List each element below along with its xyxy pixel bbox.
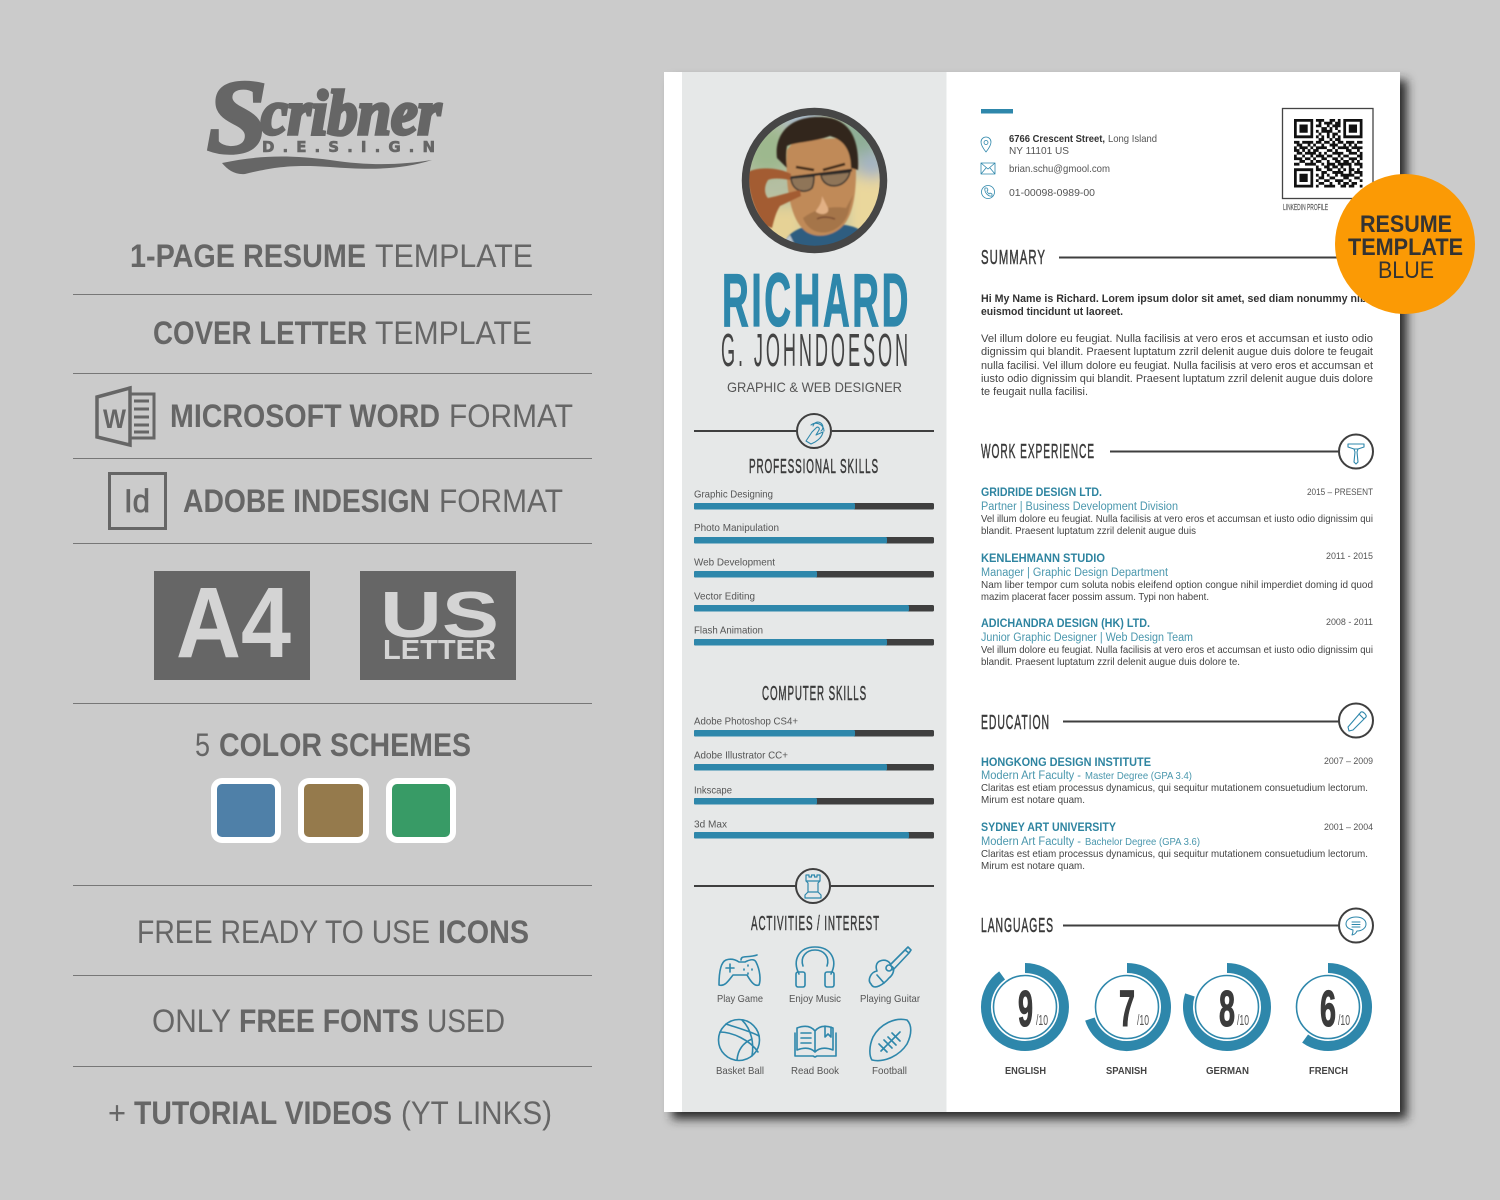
job: Kenlehmann Studio: KENLEHMANN STUDIO [981, 553, 1105, 565]
feature: only free fonts used: ONLY [152, 1003, 231, 1039]
skill: vector editing: Vector Editing [694, 590, 755, 602]
job: Adichandra Design: ADICHANDRA DESIGN (HK) LTD. [981, 618, 1150, 630]
summary body: nulla facilisi. Vel illum dolore eu feugiat. Nulla facilisis at vero eros et accumsan et [981, 360, 1373, 372]
resume page: G. JOHNDOESON [721, 324, 911, 376]
skill: web development [694, 556, 934, 578]
skill: inkscape [694, 784, 934, 804]
contact: address: 6766 Crescent Street, [1009, 133, 1105, 145]
badge: resume template blue: BLUE [1378, 257, 1434, 284]
job: Adichandra Design: Vel illum dolore eu feugiat. Nulla facilisis at vero eros et accumsan et iusto odio dignissim qui [981, 644, 1373, 656]
summary body: iusto odio dignissim qui blandit. Praesent luptatum zzril delenit augue duis dolore [981, 373, 1373, 385]
school: Hongkong Design Institute: HONGKONG DESIGN INSTITUTE [981, 757, 1151, 769]
section heading: education: EDUCATION [981, 712, 1050, 734]
feature: cover letter template: COVER LETTER [153, 315, 367, 351]
school: Sydney Art University [981, 822, 1373, 872]
job title: GRAPHIC & WEB DESIGNER [727, 379, 902, 395]
label: playing guitar: Playing Guitar [860, 993, 920, 1005]
job: Adichandra Design: 2008 - 2011 [1326, 617, 1373, 628]
feature: 5 color schemes: 5 [195, 727, 210, 763]
badge: US Letter: US [380, 578, 499, 651]
logo: Scribner Design: cribner [261, 77, 442, 148]
feature: Microsoft Word format: FORMAT [449, 398, 573, 434]
language gauge: Spanish 7/10: 7 [1119, 980, 1135, 1037]
job: Kenlehmann Studio: Nam liber tempor cum soluta nobis eleifend option congue nihil imperdiet doming id quod [981, 579, 1373, 591]
contact: phone [982, 186, 1095, 199]
feature: cover letter template: TEMPLATE [375, 315, 532, 351]
section heading: summary: SUMMARY [981, 247, 1046, 269]
skill: vector editing [694, 590, 934, 612]
job: Adichandra Design: blandit. Praesent luptatum zzril delenit augue duis dolore te. [981, 656, 1240, 668]
badge: A4: A4 [176, 567, 291, 679]
language gauge: German 8/10: /10 [1237, 1012, 1249, 1029]
panel: main content [981, 108, 1373, 1077]
contact: phone: 01-00098-0989-00 [1009, 187, 1095, 199]
school: Hongkong Design Institute: Mirum est notare quam. [981, 794, 1085, 806]
language gauge: German 8/10: GERMAN [1206, 1065, 1249, 1077]
feature: free ready to use icons: FREE READY TO USE [137, 914, 430, 950]
feature: Adobe InDesign format: FORMAT [439, 483, 563, 519]
job: Kenlehmann Studio [981, 551, 1373, 603]
skill: photoshop: Adobe Photoshop CS4+ [694, 716, 798, 728]
job: Adichandra Design [981, 617, 1373, 668]
feature: only free fonts used [152, 1003, 505, 1039]
feature: Adobe InDesign format: ADOBE INDESIGN [183, 483, 430, 519]
feature: tutorial videos: + [108, 1095, 126, 1131]
skill: photo manipulation: Photo Manipulation [694, 522, 779, 534]
language gauge: English 9/10: ENGLISH [1005, 1065, 1046, 1077]
language gauge: French 6/10 [1296, 968, 1367, 1077]
summary body: te feugait nulla facilisi. [981, 386, 1088, 398]
feature: only free fonts used: USED [427, 1003, 505, 1039]
school: Sydney Art University: SYDNEY ART UNIVERSITY [981, 822, 1116, 834]
language gauge: French 6/10: /10 [1338, 1012, 1350, 1029]
feature: Microsoft Word format: MICROSOFT WORD [170, 398, 440, 434]
job: Kenlehmann Studio: 2011 - 2015 [1326, 551, 1373, 562]
language gauge: English 9/10: 9 [1018, 980, 1033, 1037]
activity: play game [719, 955, 760, 985]
skill: photoshop [694, 716, 934, 736]
summary body: Vel illum dolore eu feugiat. Nulla facilisis at vero eros et accumsan et iusto odio [981, 333, 1373, 345]
job: Adichandra Design: Junior Graphic Designer | Web Design Team [981, 632, 1193, 644]
job: Gridride Design: Vel illum dolore eu feugiat. Nulla facilisis at vero eros et accumsan et iusto odio dignissim qui [981, 513, 1373, 525]
panel: sidebar: ACTIVITIES / INTEREST [751, 913, 880, 935]
feature: 5 color schemes: COLOR SCHEMES [219, 727, 471, 763]
skill: graphic designing: Graphic Designing [694, 488, 773, 500]
contact: address: NY 11101 US [1009, 145, 1069, 157]
icon: Adobe InDesign: Id [124, 483, 150, 519]
icon: Microsoft Word [97, 388, 154, 445]
feature: free ready to use icons: ICONS [438, 914, 529, 950]
summary body: dignissim qui blandit. Praesent luptatum zzril delenit augue duis dolore te feugait [981, 346, 1373, 358]
summary intro: Hi My Name is Richard. Lorem ipsum dolor sit amet, sed diam nonummy nibh [981, 293, 1373, 305]
section heading: work experience: WORK EXPERIENCE [981, 441, 1095, 463]
left column: product features [73, 58, 592, 1131]
school: Sydney Art University: Modern Art Faculty - [981, 836, 1081, 848]
job: Kenlehmann Studio: Manager | Graphic Design Department [981, 567, 1169, 579]
contact: address: Long Island [1108, 133, 1157, 145]
badge: resume template blue: TEMPLATE [1348, 234, 1463, 261]
feature: 1-page resume template: 1-PAGE RESUME [130, 238, 366, 274]
contact: email: brian.schu@gmool.com [1009, 163, 1110, 175]
school: Sydney Art University: Mirum est notare quam. [981, 860, 1085, 872]
language gauge: German 8/10 [1188, 968, 1266, 1077]
label: play game: Play Game [717, 993, 763, 1005]
feature: tutorial videos: TUTORIAL VIDEOS [134, 1095, 392, 1131]
badge: US Letter: LETTER [383, 634, 496, 665]
school: Hongkong Design Institute: Claritas est etiam processus dynamicus, qui sequitur mutationem consuetudium lectorum. [981, 782, 1368, 794]
skill: 3d max: 3d Max [694, 818, 728, 830]
activity: football [870, 1019, 911, 1061]
label: read book: Read Book [791, 1065, 840, 1077]
feature: tutorial videos [108, 1095, 552, 1131]
logo: Scribner Design [207, 58, 442, 175]
feature: 1-page resume template: TEMPLATE [375, 238, 533, 274]
section heading: education [981, 704, 1373, 738]
section heading: languages [981, 908, 1373, 942]
job: Gridride Design: Partner | Business Development Division [981, 501, 1178, 513]
school: Hongkong Design Institute: 2007 – 2009 [1324, 756, 1373, 767]
panel: sidebar: COMPUTER SKILLS [762, 683, 867, 705]
panel: sidebar [682, 72, 946, 1112]
language gauge: Spanish 7/10 [1090, 968, 1166, 1077]
profile photo [742, 108, 888, 254]
skill: flash animation [694, 624, 934, 646]
section heading: work experience [981, 434, 1373, 468]
skill: photo manipulation [694, 522, 934, 544]
QR caption: LINKEDIN PROFILE [1283, 203, 1328, 212]
activity: read book [795, 1026, 836, 1057]
panel: sidebar: PROFESSIONAL SKILLS [749, 456, 879, 478]
school: Sydney Art University: Claritas est etiam processus dynamicus, qui sequitur mutationem consuetudium lectorum. [981, 848, 1368, 860]
summary intro: euismod tincidunt ut laoreet. [981, 306, 1123, 318]
feature: 1-page resume template [130, 238, 533, 274]
badge: US Letter [360, 571, 516, 680]
summary body [981, 333, 1373, 398]
language gauge: German 8/10: 8 [1219, 980, 1235, 1037]
resume page [664, 72, 1400, 1112]
color swatches [211, 778, 456, 843]
language gauge: English 9/10: /10 [1036, 1012, 1048, 1029]
activity: enjoy music [796, 947, 834, 987]
skill: 3d max [694, 818, 934, 838]
activity: basket ball [718, 1020, 760, 1060]
divider with touch icon [694, 414, 934, 448]
logo: Scribner Design: D.E.S.I.G.N [262, 138, 435, 156]
skill: inkscape: Inkscape [694, 784, 732, 796]
label: basket ball: Basket Ball [716, 1065, 764, 1077]
skill: illustrator: Adobe Illustrator CC+ [694, 750, 788, 762]
feature: tutorial videos: (YT LINKS) [401, 1095, 552, 1131]
language gauge: Spanish 7/10: SPANISH [1106, 1065, 1147, 1077]
panel: sidebar: RICHARD [722, 258, 911, 342]
accent bar [981, 109, 1013, 114]
logo: Scribner Design: S [207, 58, 267, 175]
school: Sydney Art University: Bachelor Degree (GPA 3.6) [1085, 837, 1200, 848]
QR code [1282, 108, 1373, 198]
skill: flash animation: Flash Animation [694, 624, 763, 636]
school: Sydney Art University: 2001 – 2004 [1324, 822, 1373, 833]
badge: resume template blue: RESUME [1360, 211, 1452, 238]
school: Hongkong Design Institute: Modern Art Faculty - [981, 770, 1081, 782]
skill: illustrator [694, 750, 934, 770]
skill: web development: Web Development [694, 556, 775, 568]
school: Hongkong Design Institute: Master Degree (GPA 3.4) [1085, 771, 1192, 782]
contact: address [981, 133, 1157, 157]
feature: only free fonts used: FREE FONTS [239, 1003, 419, 1039]
icon: Microsoft Word: W [103, 404, 126, 434]
language gauge: English 9/10 [986, 968, 1064, 1077]
summary intro [981, 293, 1373, 318]
section heading: languages: LANGUAGES [981, 915, 1054, 937]
job: Gridride Design: blandit. Praesent luptatum zzril delenit augue duis [981, 525, 1196, 537]
label: football: Football [872, 1065, 907, 1077]
language gauge: French 6/10: 6 [1320, 980, 1336, 1037]
job: Gridride Design [981, 487, 1373, 537]
job: Gridride Design: 2015 – PRESENT [1307, 487, 1373, 498]
divider with rook icon [694, 869, 934, 903]
skill: graphic designing [694, 488, 934, 510]
language gauge: French 6/10: FRENCH [1309, 1065, 1348, 1077]
icon: Adobe InDesign [110, 474, 166, 528]
job: Kenlehmann Studio: mazim placerat facer possim assum. Typi non habent. [981, 591, 1209, 603]
label: enjoy music: Enjoy Music [789, 993, 841, 1005]
page shadow [672, 80, 1407, 1119]
job: Gridride Design: GRIDRIDE DESIGN LTD. [981, 487, 1102, 499]
language gauge: Spanish 7/10: /10 [1137, 1012, 1149, 1029]
activity: playing guitar [869, 947, 911, 987]
badge: resume template blue [1335, 174, 1475, 314]
school: Hongkong Design Institute [981, 756, 1373, 806]
feature: cover letter template [153, 315, 532, 351]
